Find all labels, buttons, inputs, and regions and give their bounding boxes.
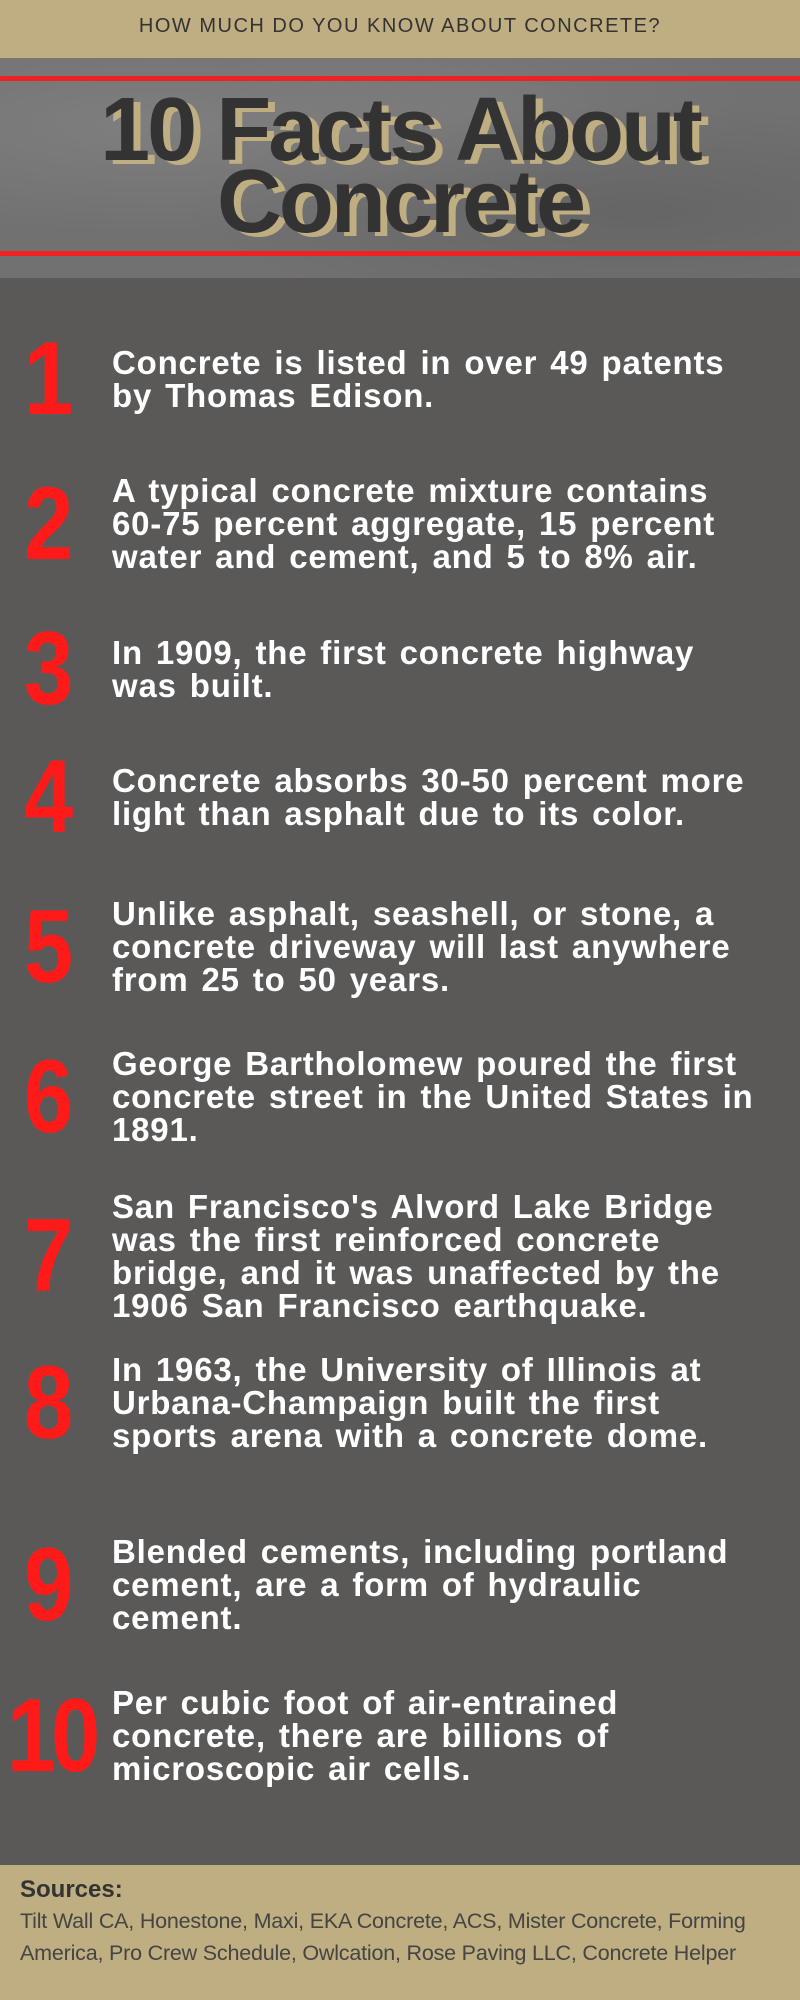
fact 7 bbox=[24, 1188, 720, 1324]
fact 5 bbox=[24, 888, 731, 1004]
title: Concrete bbox=[217, 152, 583, 252]
fact 1: by Thomas Edison. bbox=[112, 377, 434, 414]
fact 1 bbox=[24, 321, 724, 437]
fact 7: 7 bbox=[24, 1198, 68, 1314]
title: 10 Facts About bbox=[100, 80, 700, 180]
fact 3 bbox=[24, 611, 694, 727]
sources bbox=[0, 1865, 800, 2000]
fact 5: concrete driveway will last anywhere bbox=[112, 928, 731, 965]
fact 6 bbox=[24, 1038, 754, 1154]
fact 1: 1 bbox=[24, 321, 68, 437]
fact 10: concrete, there are billions of bbox=[112, 1717, 609, 1754]
fact 7: San Francisco's Alvord Lake Bridge bbox=[112, 1188, 714, 1225]
title bbox=[100, 80, 709, 252]
fact 1: Concrete is listed in over 49 patents bbox=[112, 344, 724, 381]
fact 5: 5 bbox=[24, 888, 68, 1004]
sources: America, Pro Crew Schedule, Owlcation, Rose Paving LLC, Concrete Helper bbox=[20, 1941, 736, 1965]
fact 4 bbox=[24, 739, 744, 855]
sources: Tilt Wall CA, Honestone, Maxi, EKA Concrete, ACS, Mister Concrete, Forming bbox=[20, 1909, 746, 1933]
fact 5: from 25 to 50 years. bbox=[112, 961, 450, 998]
fact 9: cement, are a form of hydraulic bbox=[112, 1566, 641, 1603]
fact 4: light than asphalt due to its color. bbox=[112, 795, 685, 832]
fact 7: was the first reinforced concrete bbox=[112, 1221, 660, 1258]
fact 6: 6 bbox=[24, 1038, 68, 1154]
sources: Sources: bbox=[20, 1876, 123, 1903]
fact 3: was built. bbox=[112, 667, 273, 704]
fact 9: cement. bbox=[112, 1599, 242, 1636]
fact 2 bbox=[24, 466, 715, 582]
fact 2: water and cement, and 5 to 8% air. bbox=[112, 538, 698, 575]
fact 7: bridge, and it was unaffected by the bbox=[112, 1254, 720, 1291]
fact 2: A typical concrete mixture contains bbox=[112, 472, 708, 509]
fact 2: 2 bbox=[24, 466, 68, 582]
fact 8: In 1963, the University of Illinois at bbox=[112, 1351, 701, 1388]
fact 6: 1891. bbox=[112, 1111, 199, 1148]
fact 5: Unlike asphalt, seashell, or stone, a bbox=[112, 895, 714, 932]
fact 6: concrete street in the United States in bbox=[112, 1078, 754, 1115]
fact 7: 1906 San Francisco earthquake. bbox=[112, 1287, 648, 1324]
top banner bbox=[0, 0, 800, 58]
fact 9: Blended cements, including portland bbox=[112, 1533, 728, 1570]
top banner: HOW MUCH DO YOU KNOW ABOUT CONCRETE? bbox=[139, 15, 661, 37]
fact 8: 8 bbox=[24, 1344, 68, 1460]
fact 10: 10 bbox=[7, 1678, 95, 1794]
fact 6: George Bartholomew poured the first bbox=[112, 1045, 737, 1082]
fact 2: 60-75 percent aggregate, 15 percent bbox=[112, 505, 715, 542]
fact 4: 4 bbox=[24, 739, 68, 855]
fact 10: microscopic air cells. bbox=[112, 1750, 471, 1787]
fact 10: Per cubic foot of air-entrained bbox=[112, 1684, 618, 1721]
fact 3: In 1909, the first concrete highway bbox=[112, 634, 694, 671]
fact 8: sports arena with a concrete dome. bbox=[112, 1417, 708, 1454]
fact 9 bbox=[24, 1526, 728, 1642]
panel: facts bbox=[0, 278, 800, 1865]
fact 10 bbox=[7, 1678, 618, 1794]
fact 8: Urbana-Champaign built the first bbox=[112, 1384, 660, 1421]
fact 3: 3 bbox=[24, 611, 68, 727]
fact 9: 9 bbox=[24, 1526, 68, 1642]
fact 4: Concrete absorbs 30-50 percent more bbox=[112, 762, 744, 799]
hero: concrete title panel bbox=[0, 58, 800, 278]
fact 8 bbox=[24, 1344, 708, 1460]
